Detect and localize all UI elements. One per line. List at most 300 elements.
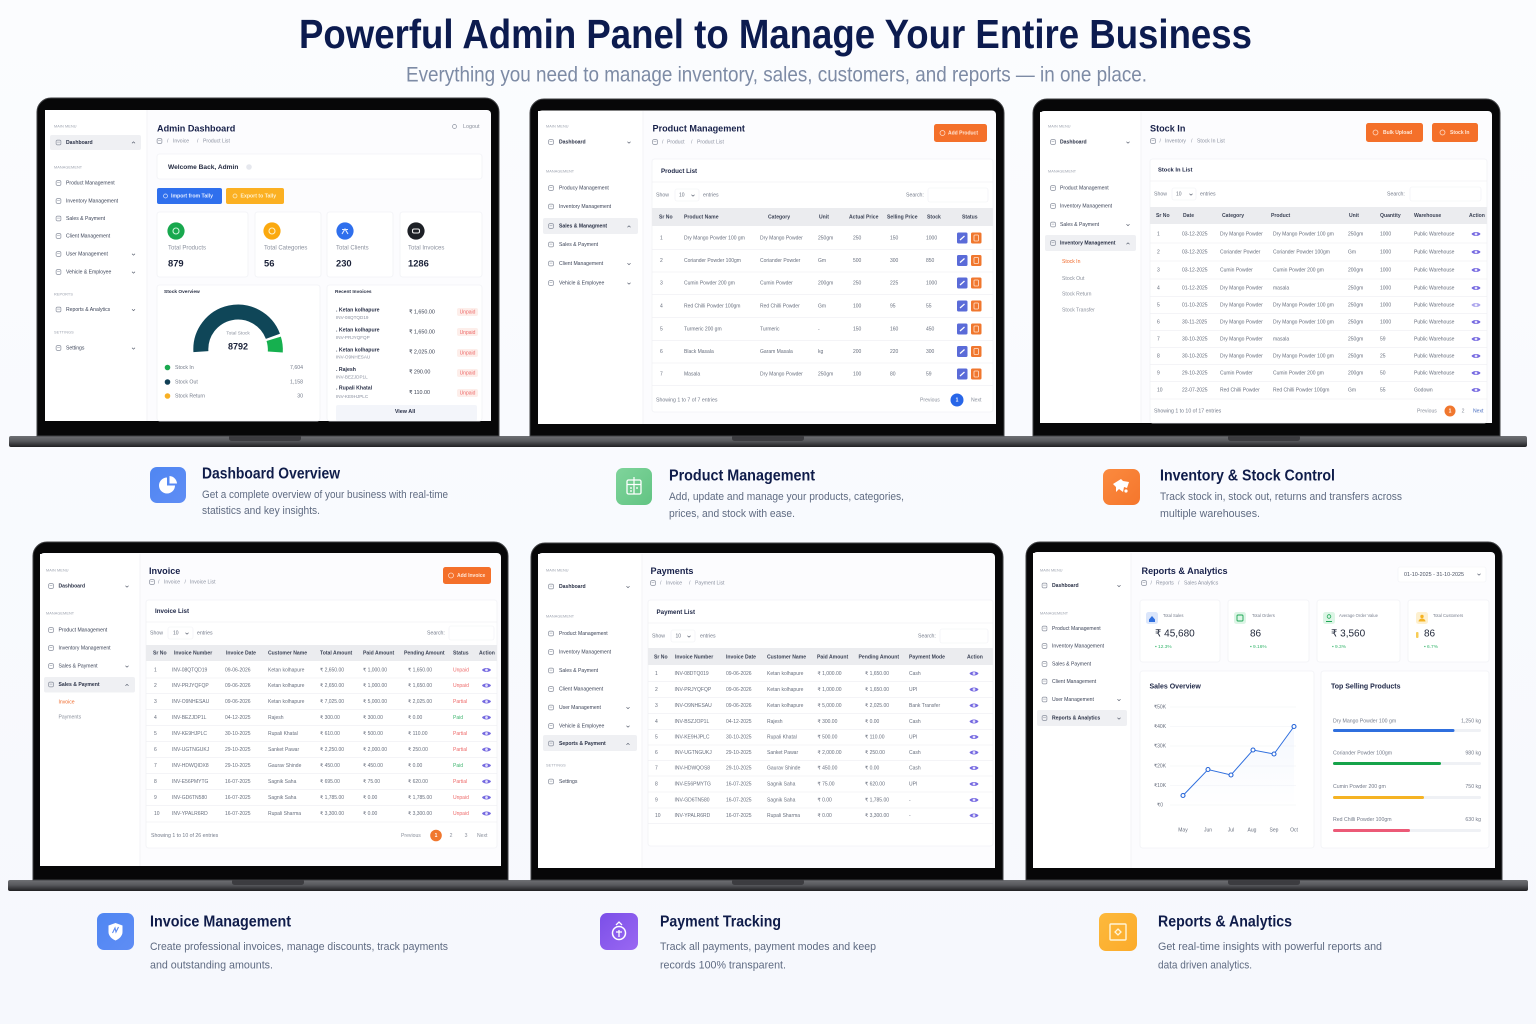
feature: dashboard overview: Dashboard Overview <box>202 466 340 482</box>
stat card: average order value: ▪ 9.3% <box>1332 644 1347 650</box>
table row 8: Public Warehouse <box>1414 354 1455 360</box>
table row 2: INV-PRJYQFQP <box>172 683 209 689</box>
table row 4: 100 <box>853 304 862 310</box>
feature: dashboard overview <box>150 466 448 517</box>
laptop bezel <box>531 543 1003 880</box>
sidebar: Sales & Payment <box>559 242 599 248</box>
table row 8: Sagnik Saha <box>268 779 297 785</box>
table header: Category <box>768 214 790 220</box>
bar: coriander powder <box>1333 750 1481 765</box>
table row 5: 1000 <box>1380 302 1391 308</box>
table header: Sr No <box>153 650 167 656</box>
page heading: Invoice <box>149 566 180 576</box>
table row 4: 250gm <box>1348 286 1363 292</box>
table footer: Showing 1 to 7 of 7 entries <box>656 398 718 404</box>
table row 1: 1000 <box>926 236 937 242</box>
table row 6 <box>1157 320 1481 326</box>
table row 9: Cumin Powder 200 gm <box>1273 370 1324 376</box>
table header: Status <box>453 650 469 656</box>
page heading: Reports & Analytics <box>1142 566 1228 576</box>
button: export to tally: Export to Tally <box>240 194 276 200</box>
panel: recent invoices: . Ketan kolhapure <box>336 328 380 334</box>
table row 5: INV-KE9HJPLC <box>674 734 710 740</box>
table row 2: Gm <box>818 258 826 264</box>
button: import from tally <box>157 188 222 204</box>
table row 5: 5 <box>660 326 663 332</box>
table row 8: INV-E56PMYTG <box>172 779 209 785</box>
table row 8: 8 <box>154 779 157 785</box>
page heading: Invoice <box>173 138 189 144</box>
table row 3: Cumin Powder <box>760 280 793 286</box>
table row 1: 250gm <box>1348 232 1363 238</box>
stat card: total orders: 86 <box>1250 628 1262 640</box>
sidebar: Product Management <box>1052 626 1101 632</box>
stat card: total customers <box>1408 600 1489 662</box>
table row 1: ₹ 1,000.00 <box>363 668 387 674</box>
table row 7: INV-HDWQOS8 <box>674 766 710 772</box>
table header <box>652 208 993 226</box>
table row 7: 250gm <box>1348 336 1363 342</box>
page heading: Payment List <box>695 580 725 586</box>
stat card: total products: Total Products <box>168 246 206 252</box>
bar: coriander powder: Coriander Powder 100gm <box>1333 750 1392 756</box>
table row 9: Cumin Powder <box>1220 370 1253 376</box>
table row 10: Godown <box>1414 388 1433 394</box>
table row 1: 1 <box>660 236 663 242</box>
table row 10: ₹ 3,300.00 <box>320 811 344 817</box>
table row 5: 160 <box>890 326 899 332</box>
table header: Customer Name <box>268 650 307 656</box>
table row 4: Rajesh <box>268 715 284 721</box>
table row 1: Dry Mango Powder <box>1220 232 1263 238</box>
bar: red chilli powder <box>1333 817 1481 832</box>
sidebar <box>538 554 642 868</box>
sidebar: User Management <box>559 705 601 711</box>
table row 7 <box>655 766 979 772</box>
page heading: / <box>662 140 664 146</box>
sidebar: Stock Out <box>1062 276 1085 282</box>
bar: cumin powder <box>1333 784 1481 799</box>
table row 5: UPI <box>909 734 917 740</box>
table row 4: ₹ 300.00 <box>363 715 383 721</box>
page heading: / <box>1178 580 1180 586</box>
table header: Invoice Number <box>675 654 713 660</box>
table controls: 10 <box>1176 192 1182 198</box>
sidebar: Sales & Payment <box>559 668 599 674</box>
table row 6: Sanket Pawar <box>268 747 299 753</box>
panel: recent invoices: INV-BEZJDP1L <box>336 374 368 380</box>
panel: product list table: Product List <box>661 168 697 175</box>
table controls: entries <box>1200 192 1216 198</box>
table row 2: Ketan kolhapure <box>767 687 804 693</box>
table row 10: Red Chilli Powder <box>1220 388 1260 394</box>
sidebar: Client Management <box>66 234 111 240</box>
panel: stock in list table: Stock In List <box>1158 168 1193 174</box>
page heading: / <box>158 580 160 586</box>
table row 4: 04-12-2025 <box>726 719 752 725</box>
panel: recent invoices <box>327 285 482 421</box>
table row 4: INV-BSZJOP1L <box>674 719 709 725</box>
feature: dashboard overview: Get a complete overview of your business with real-time <box>202 489 448 501</box>
table row 6: 6 <box>154 747 157 753</box>
sidebar: Payments <box>58 714 82 720</box>
panel: stock in list table <box>1150 159 1487 423</box>
sidebar: MANAGEMENT <box>1040 612 1069 616</box>
table row 8 <box>655 782 979 788</box>
table controls: entries <box>700 634 716 640</box>
table row 7: Paid <box>453 763 463 769</box>
table row 6: 30-11-2025 <box>1182 320 1207 326</box>
feature: reports and analytics: Reports & Analytics <box>1158 914 1292 930</box>
feature: inventory and stock control <box>1103 468 1402 520</box>
table row 10: 10 <box>1157 388 1163 394</box>
table row 1: Public Warehouse <box>1414 232 1455 238</box>
table row 1: 250 <box>853 236 862 242</box>
table row 9: 9 <box>655 798 658 804</box>
panel: sales overview <box>1140 671 1314 848</box>
panel: invoice list table: Invoice List <box>155 608 189 615</box>
laptop bezel <box>1026 542 1502 880</box>
table row 7: 29-10-2025 <box>726 766 752 772</box>
sidebar: Client Management <box>559 686 604 692</box>
page heading: / <box>197 138 199 144</box>
table row 4: INV-BEZJDP1L <box>172 715 207 721</box>
page heading: Product Management <box>652 124 745 134</box>
table row 5: 450 <box>926 326 935 332</box>
button: stock in: Stock In <box>1450 130 1469 136</box>
gauge chart: 8792 <box>228 342 248 352</box>
table row 3: 3 <box>1157 268 1160 274</box>
table row 2: ₹ 1,000.00 <box>363 683 387 689</box>
table row 10 <box>655 813 979 819</box>
table row 9: Public Warehouse <box>1414 370 1455 376</box>
table row 2: ₹ 1,650.00 <box>408 683 432 689</box>
stat card: total categories: 56 <box>264 258 274 268</box>
table row 6 <box>154 747 491 753</box>
table footer: 2 <box>450 833 453 839</box>
sidebar: Sales & Payment <box>1060 222 1100 228</box>
page heading: / <box>184 580 186 586</box>
feature: product management: Product Management <box>669 468 816 484</box>
sidebar: Inventory Management <box>1052 644 1105 650</box>
panel: payment list table: Payment List <box>656 609 695 616</box>
table row 3: 225 <box>890 280 899 286</box>
page heading: Product <box>667 140 685 146</box>
table row 3: Bank Transfer <box>909 703 940 709</box>
button: add product: Add Product <box>948 130 978 136</box>
stock legend: Stock Out <box>175 380 198 386</box>
sidebar: Vehicle & Employee <box>66 270 111 276</box>
bar: dry mango powder: 1,250 kg <box>1461 718 1481 724</box>
table row 3: ₹ 5,000.00 <box>363 699 387 705</box>
table row 2: 09-06-2026 <box>225 683 251 689</box>
table header: Quantity <box>1380 213 1401 219</box>
table row 10: 22-07-2025 <box>1182 388 1208 394</box>
sidebar: Vehicle & Employee <box>559 280 604 286</box>
table row 9: 9 <box>154 795 157 801</box>
icon: report square <box>1099 913 1137 951</box>
table row 10: INV-YPALR6RD <box>674 813 711 819</box>
table controls: entries <box>703 192 719 198</box>
feature: product management <box>616 468 904 520</box>
button: stock in <box>1432 123 1478 142</box>
table row 10: 10 <box>154 811 160 817</box>
table row 2: 2 <box>655 687 658 693</box>
table row 7: INV-HDWQIDX8 <box>172 763 209 769</box>
table row 2: 1000 <box>1380 250 1391 256</box>
table row 7: 100 <box>853 372 862 378</box>
laptop screen <box>1033 552 1495 868</box>
table footer: Previous <box>401 833 421 839</box>
table row 3: Ketan kolhapure <box>767 703 804 709</box>
table row 2: 850 <box>926 258 935 264</box>
line chart: ₹10K <box>1154 783 1167 789</box>
table row 1: INV-08DTQ019 <box>674 671 709 677</box>
table header: Warehouse <box>1414 213 1441 219</box>
table row 8 <box>1157 354 1481 360</box>
sidebar: MANAGEMENT <box>54 166 83 170</box>
table row 6 <box>660 346 982 357</box>
table row 3: INV-O9NHESAU <box>674 703 712 709</box>
table row 3: 3 <box>660 280 663 286</box>
table row 5: 30-10-2025 <box>726 734 752 740</box>
table row 1: 09-06-2026 <box>726 671 752 677</box>
bar: coriander powder: 980 kg <box>1465 750 1481 756</box>
icon: pie chart <box>150 467 186 503</box>
table row 7: masala <box>1273 336 1289 342</box>
table row 10: Unpaid <box>453 811 469 817</box>
table row 7: 7 <box>660 372 663 378</box>
sidebar: Product Management <box>66 180 115 186</box>
table row 9: 16-07-2025 <box>726 798 752 804</box>
table row 8: 30-10-2025 <box>1182 354 1208 360</box>
table row 7: Dry Mango Powder <box>760 372 803 378</box>
table row 1: Unpaid <box>453 668 469 674</box>
stat card: total invoices: 1286 <box>408 258 429 268</box>
table row 1: Dry Mango Powder <box>760 236 803 242</box>
table row 1: Dry Mango Powder 100 gm <box>684 236 745 242</box>
panel: recent invoices: View All <box>395 409 416 415</box>
stat card: total sales: ₹ 45,680 <box>1155 628 1195 640</box>
page heading: Admin Dashboard <box>157 124 235 134</box>
sidebar: MANAGEMENT <box>546 614 575 618</box>
feature: invoice management <box>97 913 448 972</box>
stock legend <box>165 365 303 400</box>
feature: invoice management: Invoice Management <box>150 914 292 930</box>
laptop bezel <box>33 542 508 880</box>
table row 9 <box>1157 370 1481 376</box>
stat card: total sales <box>1140 600 1220 662</box>
table footer: 1 <box>435 833 438 839</box>
panel: recent invoices: ₹ 1,650.00 <box>409 330 435 336</box>
table row 5: 30-10-2025 <box>225 731 251 737</box>
sidebar: MAIN MENU <box>546 568 569 572</box>
panel: sales overview: Sales Overview <box>1150 684 1201 690</box>
table row 6: ₹ 250.00 <box>408 747 428 753</box>
table row 4: Rajesh <box>767 719 783 725</box>
table row 3 <box>655 703 979 709</box>
table header <box>648 648 993 665</box>
button: bulk upload <box>1366 123 1423 142</box>
feature: product management: prices, and stock with ease. <box>669 508 795 520</box>
title: Powerful Admin Panel to Manage Your Entire Business <box>299 11 1252 57</box>
panel: stock overview: Stock Overview <box>164 289 200 295</box>
laptop bezel <box>530 99 1004 436</box>
sidebar <box>1040 112 1141 423</box>
table row 10: 16-07-2025 <box>225 811 251 817</box>
table row 6: Cash <box>909 750 921 756</box>
bar: cumin powder: Cumin Powder 200 gm <box>1333 784 1386 790</box>
table row 7: Masala <box>684 372 700 378</box>
table footer: 1 <box>956 398 959 404</box>
sidebar: Dashboard <box>559 584 586 590</box>
table row 3: Public Warehouse <box>1414 268 1455 274</box>
table row 7: 7 <box>154 763 157 769</box>
table controls: Search: <box>906 192 924 198</box>
page heading: Invoice List <box>190 580 216 586</box>
table row 3: Partial <box>453 699 467 705</box>
table header <box>146 645 497 661</box>
table row 4: ₹ 300.00 <box>320 715 340 721</box>
logout <box>452 124 480 130</box>
button: add invoice: Add Invoice <box>457 573 486 579</box>
button: export to tally <box>226 188 284 204</box>
stat card: total products: 879 <box>168 258 184 268</box>
table header <box>1150 207 1487 224</box>
table row 7: 59 <box>926 372 932 378</box>
table row 7: Public Warehouse <box>1414 336 1455 342</box>
stat card: average order value: ₹ 3,560 <box>1331 628 1366 640</box>
table row 10: 10 <box>655 813 661 819</box>
panel: invoice list table <box>146 600 497 848</box>
sidebar: Invoice <box>58 700 75 706</box>
stat card: total orders <box>1228 600 1309 662</box>
table row 1 <box>154 668 491 674</box>
table row 1: 09-06-2026 <box>225 668 251 674</box>
table header: Category <box>1222 213 1244 219</box>
table controls: entries <box>197 630 213 636</box>
table row 4: Red Chilli Powder <box>760 304 800 310</box>
laptop: reports and analytics <box>1026 542 1502 880</box>
sidebar: MAIN MENU <box>54 124 77 128</box>
table row 5: 01-10-2025 <box>1182 302 1208 308</box>
table row 2 <box>655 687 979 693</box>
table row 8: Dry Mango Powder <box>1220 354 1263 360</box>
stat card: total clients: Total Clients <box>336 246 369 252</box>
table controls: Show <box>1154 192 1167 198</box>
bar: red chilli powder: 630 kg <box>1465 817 1481 823</box>
table row 6 <box>655 750 979 756</box>
table row 5 <box>655 734 979 740</box>
table header: Sr No <box>654 654 668 660</box>
table row 3: 09-06-2026 <box>726 703 752 709</box>
table controls <box>150 626 494 640</box>
sidebar: Sales & Payment <box>58 664 98 670</box>
table row 8: 250gm <box>1348 354 1363 360</box>
table row 6: INV-UGTNGUKJ <box>674 750 712 756</box>
panel: recent invoices: Unpaid <box>460 350 476 356</box>
panel: recent invoices: ₹ 2,025.00 <box>409 350 435 356</box>
table header: Total Amount <box>320 650 353 656</box>
page heading <box>149 566 216 586</box>
sidebar: Inventory Management <box>66 198 119 204</box>
table row 1: ₹ 1,650.00 <box>865 671 889 677</box>
table row 9: ₹ 1,785.00 <box>865 798 889 804</box>
button: add invoice <box>443 567 491 584</box>
sidebar: MANAGEMENT <box>1048 170 1077 174</box>
feature: inventory and stock control: Inventory & Stock Control <box>1160 468 1335 484</box>
table controls <box>656 188 988 202</box>
table header: Action <box>967 654 983 660</box>
table row 8: ₹ 695.00 <box>320 779 340 785</box>
table row 3: 250 <box>853 280 862 286</box>
sidebar: Inventory Management <box>559 650 612 656</box>
panel: recent invoices: ₹ 1,650.00 <box>409 310 435 316</box>
table row 5: ₹ 610.00 <box>320 731 340 737</box>
table header: Status <box>962 214 978 220</box>
table row 8: 8 <box>655 782 658 788</box>
button: add product <box>934 124 987 142</box>
table row 8: INV-E56PMYTG <box>674 782 711 788</box>
table row 8: 16-07-2025 <box>225 779 251 785</box>
table row 4: Public Warehouse <box>1414 286 1455 292</box>
table row 7: Dry Mango Powder <box>1220 336 1263 342</box>
stock legend: 30 <box>297 394 303 400</box>
table row 8: ₹ 75.00 <box>818 782 835 788</box>
table footer: 3 <box>465 833 468 839</box>
laptop: dashboard overview <box>37 98 499 436</box>
table row 8: ₹ 620.00 <box>865 782 885 788</box>
table row 4: 4 <box>660 304 663 310</box>
table row 4: Cash <box>909 719 921 725</box>
table row 5: 5 <box>154 731 157 737</box>
table row 4 <box>154 715 491 721</box>
sidebar: Inventory Management <box>1060 204 1113 210</box>
feature: dashboard overview: statistics and key insights. <box>202 505 320 517</box>
table row 6: 6 <box>1157 320 1160 326</box>
sidebar: Producy Management <box>559 186 609 192</box>
sidebar: Reports & Analytics <box>66 307 111 313</box>
table row 5 <box>660 324 982 334</box>
table row 7: Gaurav Shinde <box>268 763 302 769</box>
sidebar <box>1033 553 1131 868</box>
table row 9: Sagnik Saha <box>268 795 297 801</box>
table row 9: ₹ 1,785.00 <box>408 795 432 801</box>
table row 9: 200gm <box>1348 370 1363 376</box>
page heading <box>650 566 725 586</box>
table row 2: 2 <box>1157 250 1160 256</box>
stat card: total categories <box>255 212 321 277</box>
table row 4: ₹ 0.00 <box>408 715 423 721</box>
table row 7 <box>1157 336 1481 342</box>
page heading <box>652 124 745 146</box>
panel: stock overview <box>157 285 320 421</box>
table header: Sr No <box>1156 213 1170 219</box>
table row 5: Rupali Khatal <box>268 731 298 737</box>
table row 1: 250gm <box>818 236 833 242</box>
table footer: 1 <box>1449 408 1452 414</box>
table row 3: ₹ 7,025.00 <box>320 699 344 705</box>
table row 7 <box>154 763 491 769</box>
table row 6: Dry Mango Powder 100 gm <box>1273 320 1334 326</box>
feature: reports and analytics: Get real-time insights with powerful reports and <box>1158 941 1382 953</box>
stock legend: Stock Return <box>175 394 205 400</box>
laptop bezel <box>37 98 499 436</box>
table row 5: ₹ 110.00 <box>408 731 428 737</box>
laptop: invoice management <box>33 542 508 880</box>
table row 8: Sagnik Saha <box>767 782 796 788</box>
table header: Actual Price <box>849 214 879 220</box>
